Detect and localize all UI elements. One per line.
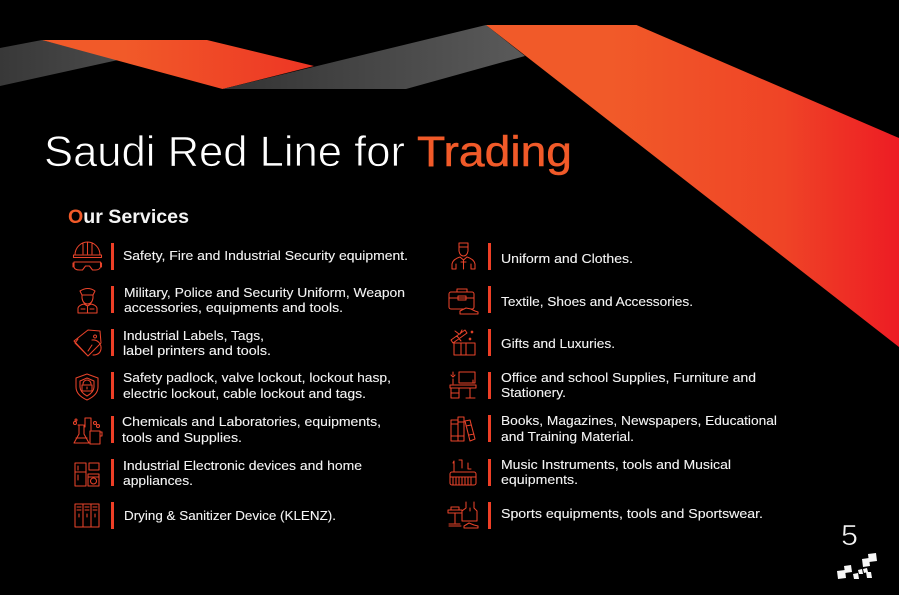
service: music: Music Instruments, tools and Musical xyxy=(501,457,731,472)
title: Saudi Red Line for xyxy=(44,128,405,176)
service: industrial labels xyxy=(74,328,271,358)
title: Trading xyxy=(417,128,572,176)
service: chemicals xyxy=(74,414,381,445)
top ribbon graphic xyxy=(0,25,899,347)
service: drying device: Drying & Sanitizer Device (KLENZ). xyxy=(124,508,336,523)
service: electronics: appliances. xyxy=(123,473,193,488)
service: books: Books, Magazines, Newspapers, Educational xyxy=(501,413,777,428)
service: electronics xyxy=(75,458,362,488)
service: chemicals: Chemicals and Laboratories, equipments, xyxy=(122,414,381,429)
icon: tags xyxy=(74,330,101,356)
service: music: equipments. xyxy=(501,472,578,487)
icon: lockers xyxy=(75,504,99,527)
icon: desk with computer xyxy=(450,372,476,398)
service: lockout: electric lockout, cable lockout and tags. xyxy=(123,386,366,401)
icon: man in uniform xyxy=(452,243,475,269)
icon: officer xyxy=(78,288,97,313)
service: office supplies: Stationery. xyxy=(501,385,566,400)
service: books xyxy=(451,413,777,444)
icon: shield xyxy=(76,374,98,400)
page number: 5 xyxy=(841,520,858,552)
service: drying device xyxy=(75,502,336,529)
service: military and police: accessories, equipments and tools. xyxy=(124,300,343,315)
service: industrial labels: label printers and tools. xyxy=(123,343,271,358)
icon: open gift box xyxy=(451,330,475,355)
service: textiles: Textile, Shoes and Accessories. xyxy=(501,294,693,309)
service: chemicals: tools and Supplies. xyxy=(122,430,242,445)
service: office supplies: Office and school Supplies, Furniture and xyxy=(501,370,756,385)
icon: briefcase and shoe xyxy=(449,289,478,314)
service: electronics: Industrial Electronic devices and home xyxy=(123,458,362,473)
icon: helmet and goggles xyxy=(73,242,102,270)
service: office supplies xyxy=(450,370,756,400)
title xyxy=(44,128,572,176)
service: lockout: Safety padlock, valve lockout, lockout hasp, xyxy=(123,370,391,385)
service: sports xyxy=(448,502,763,529)
logo mark xyxy=(837,553,877,579)
service: music xyxy=(450,457,731,487)
service: gifts xyxy=(451,329,615,356)
service: uniform xyxy=(452,243,633,270)
service: gifts: Gifts and Luxuries. xyxy=(501,336,615,351)
service: uniform: Uniform and Clothes. xyxy=(501,251,633,266)
service: textiles xyxy=(449,286,693,314)
icon: books xyxy=(451,417,475,441)
icon: laboratory flasks xyxy=(74,418,102,444)
icon: dumbbell, vest and shoe xyxy=(448,502,478,528)
service: books: and Training Material. xyxy=(501,429,634,444)
service: lockout xyxy=(76,370,391,401)
icon: appliances xyxy=(75,463,99,486)
service: safety equipment xyxy=(73,242,408,270)
service: safety equipment: Safety, Fire and Industrial Security equipment. xyxy=(123,248,408,263)
icon: keyboard and notes xyxy=(450,460,476,485)
service: military and police xyxy=(78,285,405,315)
service: sports: Sports equipments, tools and Sportswear. xyxy=(501,506,763,521)
heading: our services: Our Services xyxy=(68,207,189,228)
service: military and police: Military, Police and Security Uniform, Weapon xyxy=(124,285,405,300)
service: industrial labels: Industrial Labels, Tags, xyxy=(123,328,264,343)
